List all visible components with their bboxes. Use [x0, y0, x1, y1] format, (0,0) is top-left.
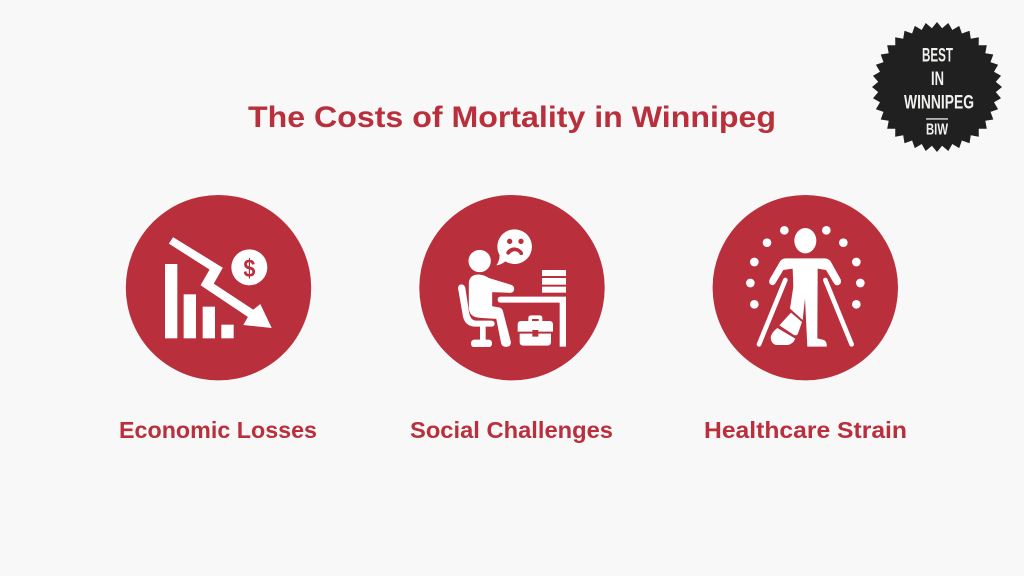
books: [542, 270, 566, 293]
circle: healthcare strain: [713, 195, 898, 380]
arrow: falling trend: [170, 238, 270, 327]
label: social challenges: Social Challenges: [410, 417, 613, 443]
leg cast: [771, 313, 802, 345]
briefcase: [518, 316, 553, 345]
icon: dollar coin: $: [243, 255, 255, 283]
dots ring: [746, 226, 865, 309]
icon: sad person at desk: [458, 229, 566, 347]
person: [469, 250, 514, 346]
chair: [458, 285, 494, 347]
badge: text: BEST: [922, 45, 953, 66]
badge: text: WINNIPEG: [904, 92, 974, 113]
icon: falling chart with dollar coin: [165, 238, 270, 338]
badge: text: IN: [931, 69, 944, 90]
badge: text: BIW: [926, 122, 949, 139]
badge: Best in Winnipeg: [872, 22, 1002, 152]
circle: economic losses: [126, 195, 311, 380]
badge: text: [904, 45, 974, 139]
title: The Costs of Mortality in Winnipeg: [248, 101, 776, 134]
person: [769, 228, 841, 347]
panel: economic losses: [119, 195, 317, 443]
badge: serrated seal: [872, 22, 1002, 152]
panel: social challenges: [410, 195, 613, 443]
panel: healthcare strain: [704, 195, 907, 443]
crutches: [759, 280, 852, 344]
circle: social challenges: [419, 195, 605, 380]
label: economic losses: Economic Losses: [119, 417, 317, 443]
desk: [498, 297, 566, 347]
icon: injured person on crutches: [746, 226, 865, 347]
speech bubble with sad face: [496, 229, 532, 265]
label: healthcare strain: Healthcare Strain: [704, 417, 907, 443]
bar chart: [165, 264, 234, 338]
